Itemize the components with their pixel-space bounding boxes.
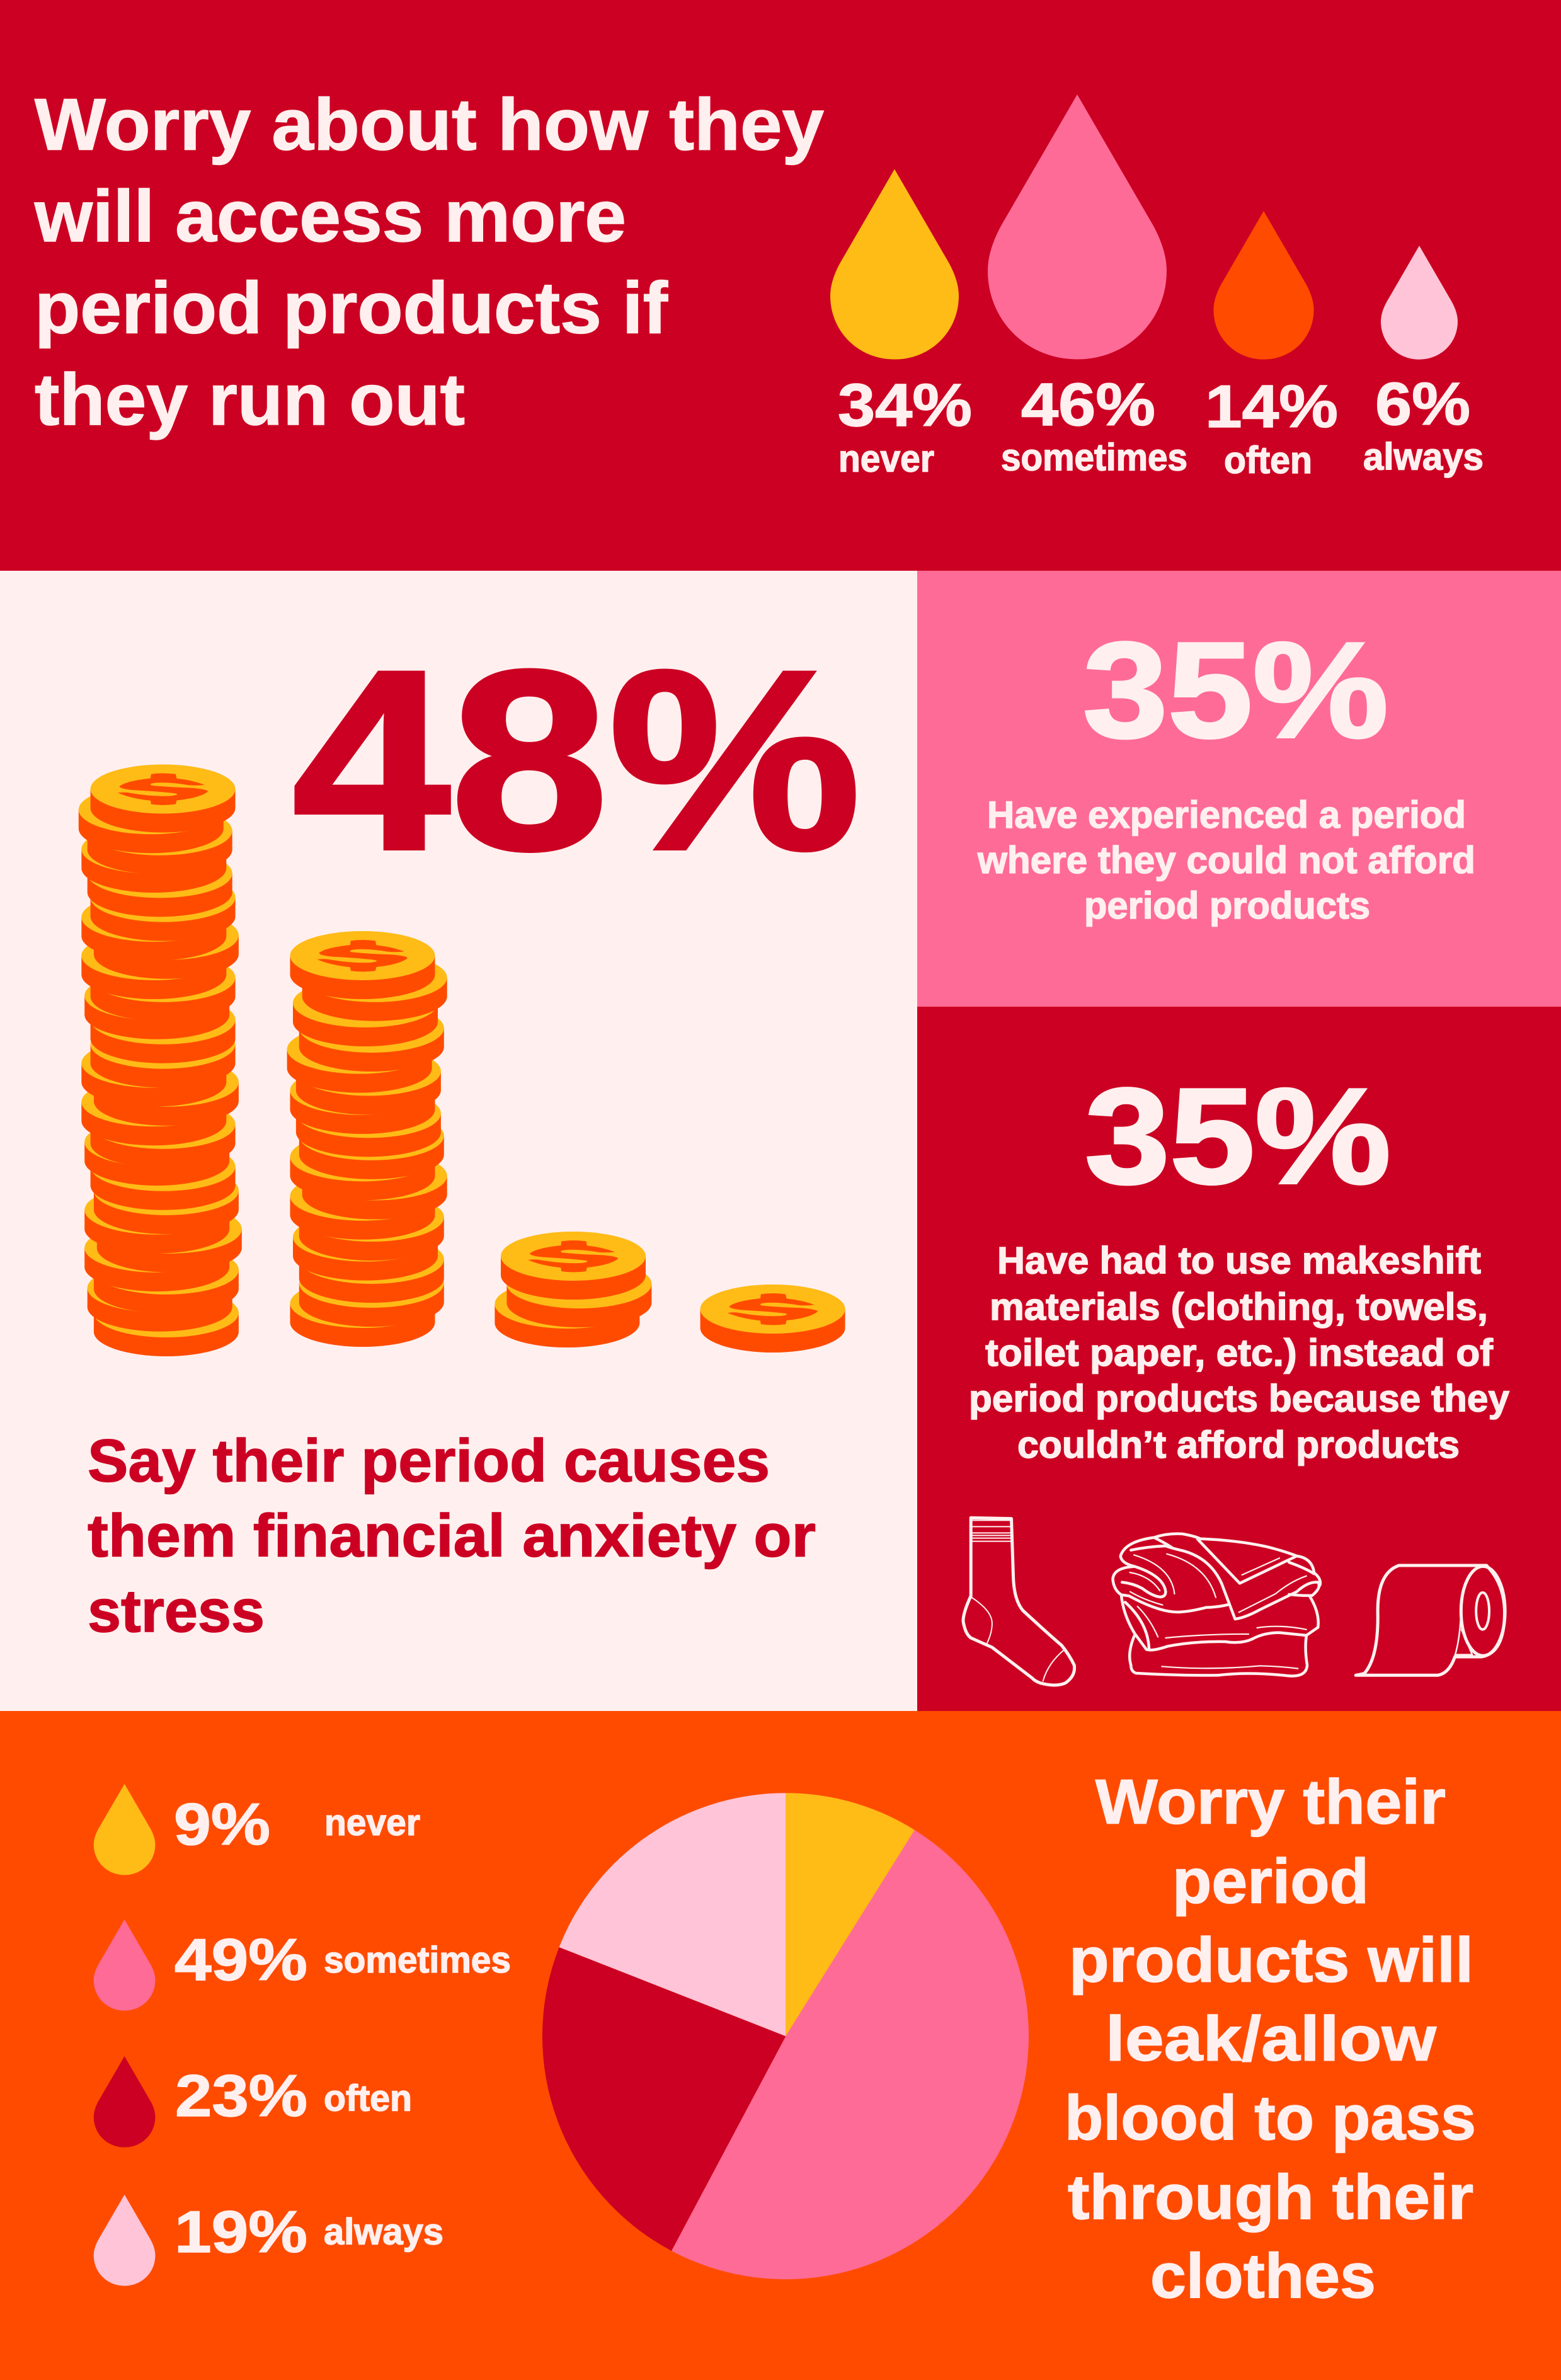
panel: makeshift materials xyxy=(917,1007,1561,1711)
title: worry about access: will access more xyxy=(34,175,626,257)
pie chart xyxy=(542,1793,1029,2279)
title: worry about access: they run out xyxy=(35,358,465,440)
stat: 46% sometimes: sometimes xyxy=(1001,436,1187,478)
stat: 14% often: often xyxy=(1224,439,1312,481)
icon: sock xyxy=(963,1518,1075,1685)
big number: 35%: 35% xyxy=(1085,1060,1391,1212)
legend: 49% sometimes: 49% xyxy=(174,1926,307,1993)
title: leak worry: blood to pass xyxy=(1065,2083,1476,2153)
text: makeshift caption: Have had to use makeshift xyxy=(997,1240,1481,1282)
panel: leak worry xyxy=(0,1711,1561,2380)
panel: financial anxiety xyxy=(0,571,917,1711)
text: financial anxiety caption: stress xyxy=(88,1577,265,1645)
title: worry about access xyxy=(34,83,824,440)
legend: 23% often: 23% xyxy=(175,2062,307,2129)
stat: 6% always: 6% xyxy=(1375,370,1470,438)
text: makeshift caption: toilet paper, etc.) instead of xyxy=(985,1332,1494,1374)
big number: 48%: 48% xyxy=(292,617,861,903)
legend: 19% always xyxy=(94,2195,443,2286)
legend: 9% never: never xyxy=(324,1802,420,1843)
coin stack 2 xyxy=(287,931,447,1347)
legend: 9% never: 9% xyxy=(174,1791,270,1857)
legend: 9% never xyxy=(94,1784,420,1875)
text: makeshift caption: couldn’t afford products xyxy=(1017,1424,1460,1466)
title: worry about access: Worry about how they xyxy=(35,83,824,165)
text: makeshift caption xyxy=(969,1240,1510,1466)
legend: 49% sometimes xyxy=(94,1919,511,2011)
legend: 23% often: often xyxy=(324,2078,412,2119)
legend: 23% often xyxy=(94,2056,412,2148)
coin stack 3 xyxy=(495,1232,651,1347)
title: leak worry: products will xyxy=(1069,1925,1473,1996)
text: makeshift caption: period products because they xyxy=(969,1378,1510,1420)
title: leak worry: period xyxy=(1172,1846,1369,1917)
title: leak worry: clothes xyxy=(1150,2241,1376,2311)
title: leak worry: Worry their xyxy=(1095,1766,1446,1837)
coin stack 4 xyxy=(700,1284,845,1353)
stat: 34% never: 34% xyxy=(838,372,972,439)
stat: 46% sometimes xyxy=(988,94,1187,478)
text: could not afford caption: period products xyxy=(1084,884,1370,927)
title: leak worry: through their xyxy=(1068,2162,1473,2233)
legend: 19% always: always xyxy=(324,2211,443,2252)
stat: 14% often: 14% xyxy=(1205,373,1338,440)
stat: 6% always: always xyxy=(1363,436,1484,478)
panel: could not afford xyxy=(917,571,1561,1007)
stat: 6% always xyxy=(1363,246,1484,478)
text: could not afford caption xyxy=(977,794,1475,927)
stat: 14% often xyxy=(1205,211,1338,481)
title: leak worry: leak/allow xyxy=(1106,2004,1436,2074)
title: leak worry xyxy=(1065,1766,1476,2311)
title: worry about access: period products if xyxy=(35,267,668,349)
panel: period product access xyxy=(0,0,1561,571)
text: makeshift caption: materials (clothing, towels, xyxy=(990,1286,1488,1328)
stat: 34% never: never xyxy=(838,438,934,480)
text: could not afford caption: where they could not afford xyxy=(977,839,1475,881)
stat: 46% sometimes: 46% xyxy=(1021,371,1155,438)
big number: 35%: 35% xyxy=(1083,614,1388,766)
icon: folded towels xyxy=(1113,1534,1320,1676)
legend: 19% always: 19% xyxy=(174,2199,307,2265)
text: could not afford caption: Have experienced a period xyxy=(987,794,1466,836)
text: financial anxiety caption: them financial anxiety or xyxy=(88,1502,816,1570)
coin stack 1 xyxy=(79,765,242,1356)
text: financial anxiety caption xyxy=(88,1427,816,1645)
icon: toilet paper roll xyxy=(1356,1565,1505,1675)
stat: 34% never xyxy=(830,169,972,480)
text: financial anxiety caption: Say their period causes xyxy=(88,1427,770,1495)
legend: 49% sometimes: sometimes xyxy=(324,1940,511,1981)
